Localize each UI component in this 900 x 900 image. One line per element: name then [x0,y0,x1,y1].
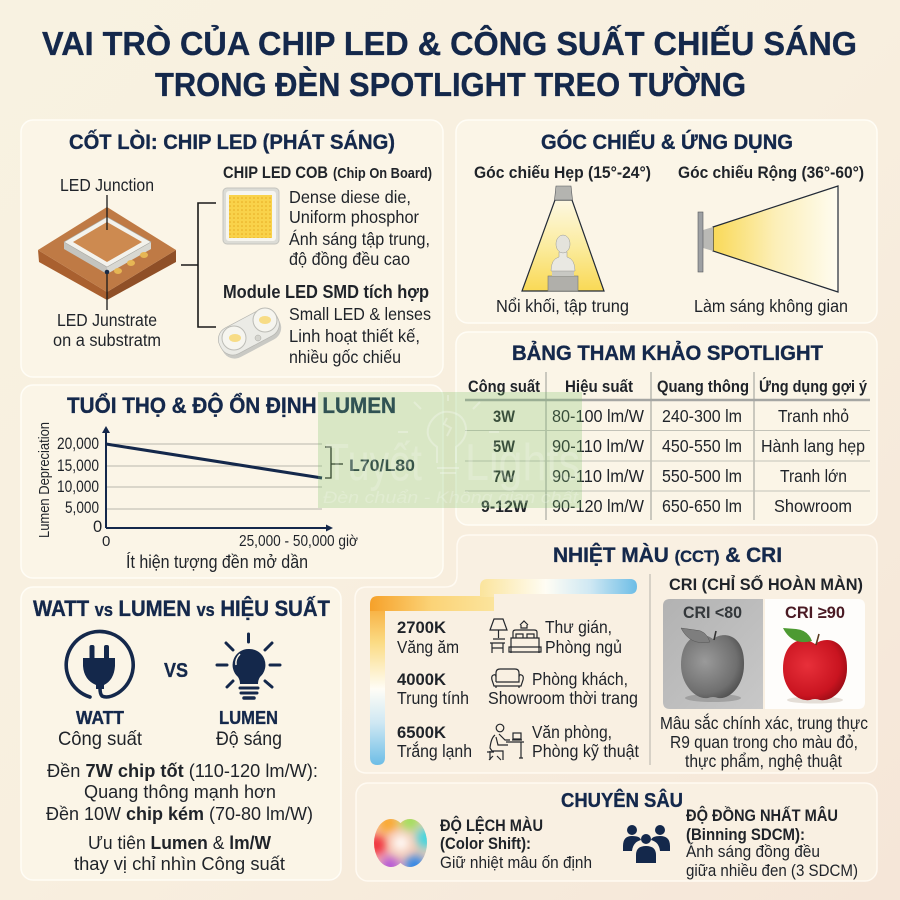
panel: spotlight reference table [456,332,877,525]
table: spotlight data: Tranh nhỏ [778,406,849,426]
heading: CCT and CRI: NHIỆT MÀU (CCT) & CRI [553,542,782,567]
text: COB description: Ánh sáng tập trung, [289,229,430,249]
heading: chip LED COB: (Chip On Board) [333,165,432,182]
text: cool use [532,722,639,761]
label: lumen [216,707,282,750]
text: SMD description: Linh hoạt thiết kế, [289,326,420,346]
line chart: lumen depreciation: 5,000 [65,499,99,517]
text: 6500K: 6500K [397,723,447,742]
panel: beam angle and use [456,120,877,323]
image: red apple CRI above 90: CRI ≥90 [785,603,845,622]
text: neutral use: Showroom thời trang [488,688,638,708]
title: VAI TRÒ CỦA CHIP LED & CÔNG SUẤT CHIẾU SÁNG [42,24,857,62]
label: LED Junction: LED Junction [60,175,154,195]
table: spotlight data: 3W [493,407,516,426]
text: colour shift: ĐỘ LỆCH MÀU [440,816,543,835]
gradient: colour temperature scale [370,579,637,765]
table: spotlight data: Hành lang hẹp [761,436,865,456]
text: cool use: Văn phòng, [532,722,612,742]
image: grey apple CRI below 80 [663,599,763,709]
panel: colour temperature and CRI [355,535,877,773]
heading: table: BẢNG THAM KHẢO SPOTLIGHT [512,340,823,365]
panel: core chip LED [21,120,443,377]
panel: advanced [356,783,877,881]
icon: people group [623,825,670,863]
image: red apple CRI above 90 [765,599,865,709]
heading: core chip LED: CỐT LÒI: CHIP LED (PHÁT SÁNG) [69,128,395,154]
text: 4000K: Trung tính [397,688,469,708]
text: CRI note: Mâu sắc chính xác, trung thực [660,712,868,733]
line chart: lumen depreciation: 15,000 [57,457,99,475]
text: CRI note: R9 quan trong cho màu đỏ, [670,732,858,752]
table: spotlight data: 9-12W [481,497,529,516]
label: wide beam: Góc chiếu Rộng (36°-60°) [678,163,864,182]
image: grey apple CRI below 80: CRI <80 [683,603,742,622]
table: spotlight data: Ứng dụng gợi ý [759,377,868,396]
caption: wide beam: Làm sáng không gian [694,296,848,316]
watermark: Đèn chuẩn - Không gian chất [323,488,579,507]
heading: watt vs lumen: WATT vs LUMEN vs HIỆU SUẤT [33,596,330,621]
table: spotlight data: 90-110 lm/W [552,436,644,456]
label: LED substrate: LED Junstrate [57,310,157,330]
watermark [318,392,582,508]
text: recommendation: Ưu tiên Lumen & lm/W [88,832,271,853]
icon: office worker at desk [487,724,524,760]
line chart: lumen depreciation [36,422,358,550]
text: cool use: Phòng kỹ thuật [532,741,639,761]
heading: CRI: CRI (CHỈ SỐ HOÀN MÀN) [669,574,863,594]
icon: plug [66,631,133,697]
text: comparison: Quang thông mạnh hơn [84,781,276,802]
text: 6500K: Trắng lạnh [397,740,472,761]
text: recommendation: thay vị chỉ nhìn Công suất [74,853,285,874]
text: CRI note [660,712,868,771]
heading: advanced: CHUYÊN SÂU [561,788,683,812]
bracket connector [181,203,216,327]
watermark: Tuyết [325,434,422,492]
icon: light bulb [217,634,280,698]
callout: L70/L80 bracket [325,447,415,478]
heading: lifetime: TUỔI THỌ & ĐỘ ỔN ĐỊNH LUMEN [67,393,396,418]
icon: lamp and bed [490,619,541,653]
text: COB description: Dense diese die, [289,187,411,207]
text: 6500K [397,723,472,761]
text: SMD description: Small LED & lenses [289,304,431,324]
text: comparison [46,760,318,824]
text: neutral use [488,669,638,708]
table: spotlight data: 240-300 lm [662,406,742,426]
diagram: wide beam from wall [698,186,838,292]
table: spotlight data: 80-100 lm/W [552,406,644,426]
text: warm use [545,617,622,657]
text: warm use: Phòng ngủ [545,637,622,657]
table: spotlight data: Tranh lớn [780,466,847,486]
text: SMD description [289,304,431,367]
text: CRI note: thực phẩm, nghệ thuật [685,751,842,771]
table: spotlight data: Hiệu suất [565,378,633,396]
watermark: Lights [465,434,580,492]
text: comparison: Đền 10W chip kém (70-80 lm/W) [46,803,313,824]
text: binning: ĐỘ ĐỒNG NHẤT MÂU [686,806,838,825]
heading: SMD module: Module LED SMD tích hợp [223,281,429,302]
label: narrow beam: Góc chiếu Hẹp (15°-24°) [474,163,651,182]
caption: lifetime: Ít hiện tượng đền mở dần [126,552,308,572]
text: 4000K [397,670,469,708]
panel: watt vs lumen [21,587,341,880]
label: LED substrate [53,310,161,350]
table: spotlight data: 7W [493,467,516,486]
label: watt: WATT [76,707,125,728]
icon: SMD module [214,304,286,363]
text: colour shift: (Color Shift): [440,835,531,853]
table: spotlight data: 450-550 lm [662,436,742,456]
line chart: lumen depreciation: 0 [102,533,110,550]
label: LED substrate: on a substratm [53,330,161,350]
heading: chip LED COB: CHIP LED COB [223,163,328,182]
line chart: lumen depreciation: 20,000 [57,435,99,453]
panel: lifetime and lumen stability [21,385,443,578]
icon: colour shift [374,819,427,867]
label: watt: Công suất [58,728,143,750]
table: spotlight data: 5W [493,437,516,456]
text: SMD description: nhiều gốc chiếu [289,347,401,367]
text: COB description: Uniform phosphor [289,207,419,227]
text: colour shift: Giữ nhiệt mâu ốn định [440,854,592,872]
callout: L70/L80 bracket: L70/L80 [349,456,415,475]
text: binning: (Binning SDCM): [686,826,805,844]
text: comparison: Đền 7W chip tốt (110-120 lm/W): [47,760,318,781]
text: warm use: Thư gián, [545,617,612,637]
caption: narrow beam: Nổi khối, tập trung [496,296,629,316]
text: colour shift [440,816,592,872]
line chart: lumen depreciation: Lumen Depreciation [36,422,53,538]
icon: COB chip [223,188,279,244]
table: spotlight data: Quang thông [657,378,749,396]
text: vs: VS [164,660,188,682]
text: 2700K [397,618,459,657]
diagram: narrow beam with bust [522,186,604,291]
title: TRONG ĐÈN SPOTLIGHT TREO TƯỜNG [155,66,746,103]
text: binning: Ánh sáng đồng đều [686,842,820,861]
text: recommendation [74,832,285,874]
table: spotlight data: 650-650 lm [662,496,742,516]
text: COB description [289,187,430,269]
text: COB description: độ đồng đều cao [289,249,410,269]
line chart: lumen depreciation: 10,000 [57,478,99,496]
heading: chip LED COB [223,163,432,182]
table: spotlight data: 90-120 lm/W [552,496,644,516]
icon: sofa [492,669,523,688]
text: binning [686,806,858,880]
text: neutral use: Phòng khách, [532,669,628,689]
line chart: lumen depreciation: 0 [93,518,102,536]
table: spotlight data [465,372,870,520]
table: spotlight data: Showroom [774,496,852,516]
text: 2700K: 2700K [397,618,447,637]
label: watt [58,707,143,750]
text: 4000K: 4000K [397,670,447,689]
text: 2700K: Văng ăm [397,637,459,657]
label: lumen: Độ sáng [216,728,282,750]
line chart: lumen depreciation: 25,000 - 50,000 giờ [239,533,358,550]
diagram: isometric LED chip [38,195,176,310]
label: lumen: LUMEN [219,707,278,728]
table: spotlight data: 550-500 lm [662,466,742,486]
table: spotlight data: Công suất [468,378,540,396]
title [42,24,857,103]
text: binning: giữa nhiều đen (3 SDCM) [686,862,858,880]
heading: beam angle: GÓC CHIẾU & ỨNG DỤNG [541,129,793,154]
table: spotlight data: 90-110 lm/W [552,466,644,486]
